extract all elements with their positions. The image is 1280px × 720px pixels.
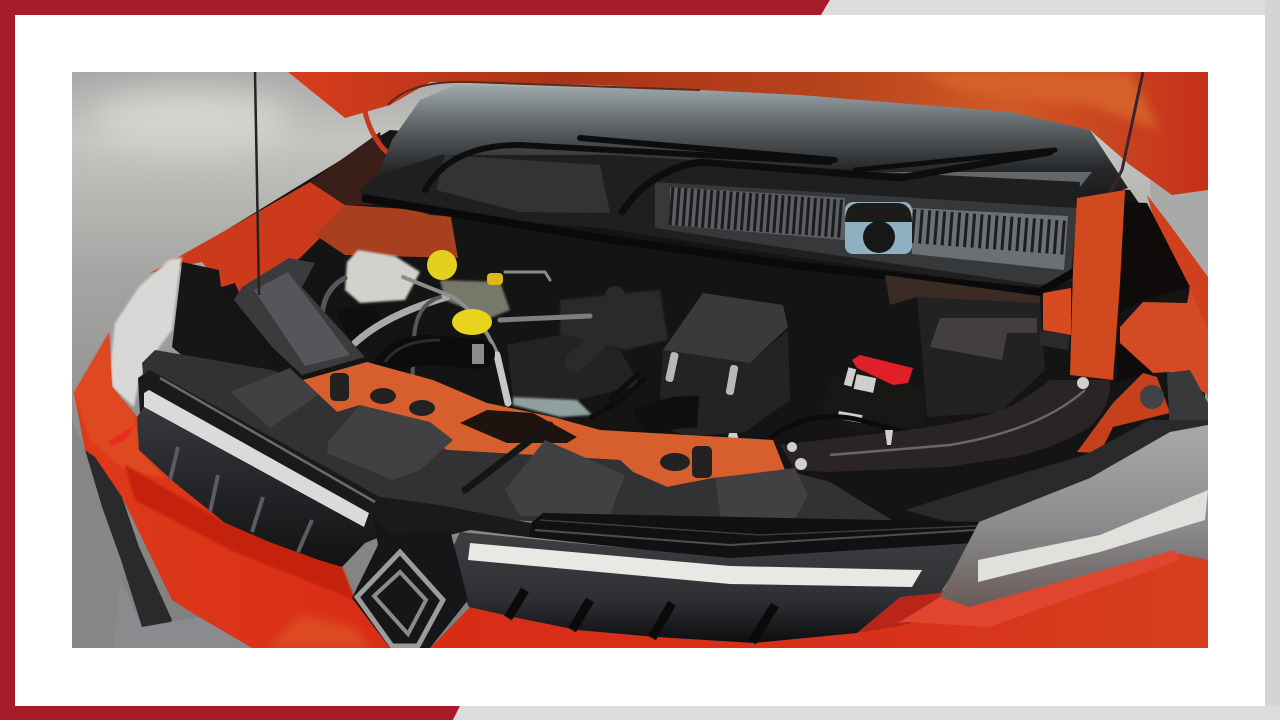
engine: yellow oil cap: [452, 309, 492, 335]
central chrome strip: [468, 543, 922, 587]
right fender outer orange: [1147, 195, 1208, 400]
lower grey bumper: [114, 563, 252, 648]
antenna rod: [255, 72, 259, 295]
engine: silver cylinder head patch: [513, 397, 592, 417]
red body lower: [74, 333, 1208, 648]
brown firewall patch: [885, 275, 1040, 305]
road highlight: [90, 90, 290, 150]
lamp back dark surround: [905, 420, 1208, 525]
frame: left red bar: [0, 0, 15, 720]
left dark mount: [172, 262, 275, 383]
engine: black intake hose: [385, 340, 480, 385]
cowl vent grille right: [912, 208, 1068, 270]
left fender dark gap: [310, 132, 385, 205]
right headlamp red rim: [898, 550, 1180, 627]
road background: [72, 72, 1208, 648]
strut side bracket: [1043, 288, 1071, 335]
battery labels: [837, 367, 876, 423]
logo emblem badge: [352, 512, 468, 648]
right headlamp light strip: [978, 490, 1208, 582]
hood underside: [288, 72, 1208, 195]
photo: engine bay of an orange car: [72, 72, 1208, 648]
engine: central dark block: [507, 335, 640, 400]
engine: intake silver collar: [472, 344, 484, 364]
fuse box: [917, 297, 1045, 417]
right arched black trim: [780, 380, 1110, 472]
central tooth gaps: [508, 590, 775, 642]
washer bottle cap: [845, 202, 912, 254]
panel raised blocks: [230, 368, 808, 528]
windshield right reflection: [882, 172, 1092, 187]
engine: silver hoses: [322, 272, 590, 403]
hood stay strut right: [1108, 72, 1144, 193]
left hood hinge: [365, 112, 390, 155]
left tooth fins: [170, 447, 312, 552]
left strut shield: [234, 258, 365, 375]
hood stay rod: [465, 425, 550, 490]
frame: bottom grey bar: [453, 706, 1280, 720]
right inner orange strut: [1070, 190, 1125, 380]
frame: top red bar: [0, 0, 830, 15]
red fill beside lamp: [850, 590, 965, 634]
hood bright patch: [920, 72, 1160, 130]
left black grille band: [138, 370, 531, 543]
cowl left raised block: [436, 155, 610, 213]
orange cross member: [303, 362, 785, 487]
fuse box bolt bracket: [1040, 330, 1070, 350]
black front plastic panel: [142, 350, 895, 522]
body lower highlight: [270, 615, 370, 648]
right orange bracket: [1120, 288, 1208, 395]
engine: grey upper details: [560, 290, 668, 350]
engine: yellow cap: [427, 250, 457, 280]
black hose over bay: [770, 417, 905, 438]
windshield: [372, 85, 1128, 205]
pins on cross member: [330, 373, 712, 478]
right fender dark cavity: [1120, 202, 1190, 313]
central grille: [447, 532, 974, 643]
right fender lower cavity: [1117, 345, 1152, 382]
mount cup: [1140, 385, 1164, 409]
engine: left fuse block: [335, 305, 382, 340]
right dark mount: [1167, 370, 1208, 420]
battery: [820, 365, 925, 432]
engine: coolant tank: [345, 250, 420, 303]
left grille gloss line: [160, 378, 375, 502]
right headlamp: [940, 425, 1208, 607]
engine: corrugated hose: [575, 296, 615, 362]
left grille teeth: [137, 407, 365, 567]
air intake corrugated hose: [640, 412, 698, 425]
cowl vent grille left: [670, 187, 845, 240]
engine: black side hoses: [590, 372, 645, 418]
body crease dark: [125, 465, 355, 600]
left chrome strip: [144, 390, 369, 527]
air filter box: [660, 293, 790, 436]
hood inner seal: [388, 82, 700, 105]
central ribbed black band: [528, 513, 979, 562]
cowl lower lip: [362, 198, 1078, 292]
cross member hole: [460, 410, 577, 443]
frame: bottom red bar: [0, 706, 460, 720]
left side trim strip: [85, 450, 172, 630]
road strip left of trim: [72, 420, 122, 648]
cowl panel: [358, 155, 1080, 290]
left headlamp: [109, 257, 182, 407]
frame: top grey bar: [821, 0, 1280, 15]
left orange block: [315, 205, 458, 258]
body upper flank sheen: [74, 333, 165, 478]
lower orange brace: [1077, 373, 1170, 453]
engine: small yellow tab: [487, 273, 503, 285]
right road patch: [1150, 180, 1208, 222]
left fender inner orange: [150, 182, 345, 295]
small reflection on flank: [108, 425, 135, 446]
battery red terminal: [852, 355, 913, 385]
wiper arms: [425, 138, 1055, 212]
cowl grille surround: [655, 182, 1078, 285]
engine bay dark base: [210, 130, 1205, 530]
engine: reservoir mid: [440, 280, 510, 318]
white clips: [725, 377, 1089, 470]
frame: right grey bar: [1265, 0, 1280, 720]
